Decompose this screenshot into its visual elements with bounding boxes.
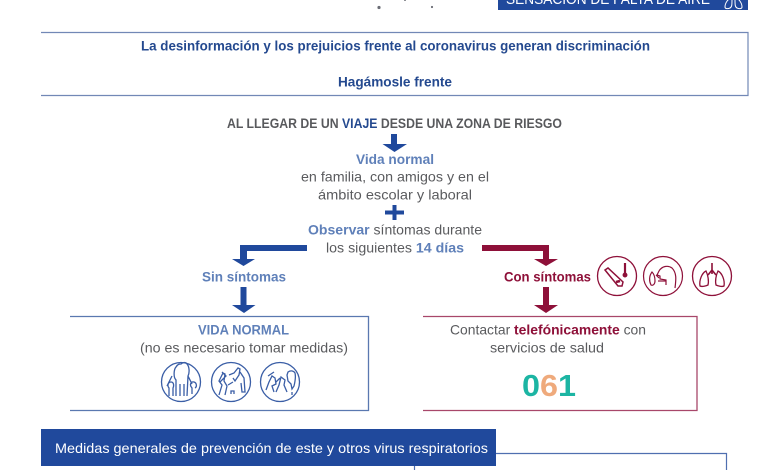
text: observe symptoms: los siguientes 14 días — [326, 240, 464, 256]
arrow: down to vida normal box — [232, 287, 256, 313]
arrow: down to contact box — [534, 287, 558, 313]
heading: hagámosle frente: Hagámosle frente — [338, 74, 452, 90]
text: vida normal heading: Vida normal — [356, 151, 434, 167]
panel: discrimination message — [41, 32, 748, 96]
heading: prevention measures — [41, 429, 496, 466]
icon: thermometer — [598, 256, 636, 296]
icon: plus sign — [385, 205, 404, 220]
text: vida normal description: ámbito escolar y laboral — [318, 186, 472, 202]
heading: travel from risk zone: AL LLEGAR DE UN VIAJE DESDE UNA ZONA DE RIESGO — [227, 116, 562, 131]
label: sin síntomas: Sin síntomas — [202, 268, 286, 284]
top banner: sensación de falta de aire — [498, 0, 748, 10]
icon: lungs — [692, 256, 732, 296]
text: contact by phone: Contactar telefónicamente con — [450, 322, 646, 338]
panel: with symptoms — [423, 316, 697, 410]
icon: friends group — [212, 362, 250, 402]
panel: no symptoms — [70, 316, 368, 410]
arrow: to sin síntomas — [232, 245, 307, 266]
panel outline: prevention measures — [414, 454, 726, 470]
text: vida normal description: en familia, con amigos y en el — [301, 168, 489, 184]
label: con síntomas: Con síntomas — [504, 268, 591, 284]
arrow: to con síntomas — [482, 245, 558, 266]
icon: workplace group — [260, 362, 300, 402]
text: contact by phone — [450, 322, 646, 356]
text: observe symptoms: Observar síntomas durante — [308, 222, 482, 238]
top decorative dots from previous section — [377, 0, 433, 9]
icon: coughing person — [644, 256, 682, 296]
text: observe symptoms — [308, 222, 482, 256]
icon: family — [162, 362, 200, 402]
arrow: down to vida normal — [382, 134, 407, 152]
text: vida normal description — [301, 168, 489, 202]
heading: discrimination message: La desinformación y los prejuicios frente al coronavirus generan discriminación — [141, 38, 650, 54]
text: contact by phone: servicios de salud — [490, 340, 604, 356]
heading: prevention measures: Medidas generales de prevención de este y otros virus respiratorios — [55, 440, 488, 456]
phone number: 061: 061 — [522, 368, 576, 403]
heading: vida normal: VIDA NORMAL — [198, 322, 289, 338]
text: no measures needed: (no es necesario tomar medidas) — [140, 340, 348, 356]
